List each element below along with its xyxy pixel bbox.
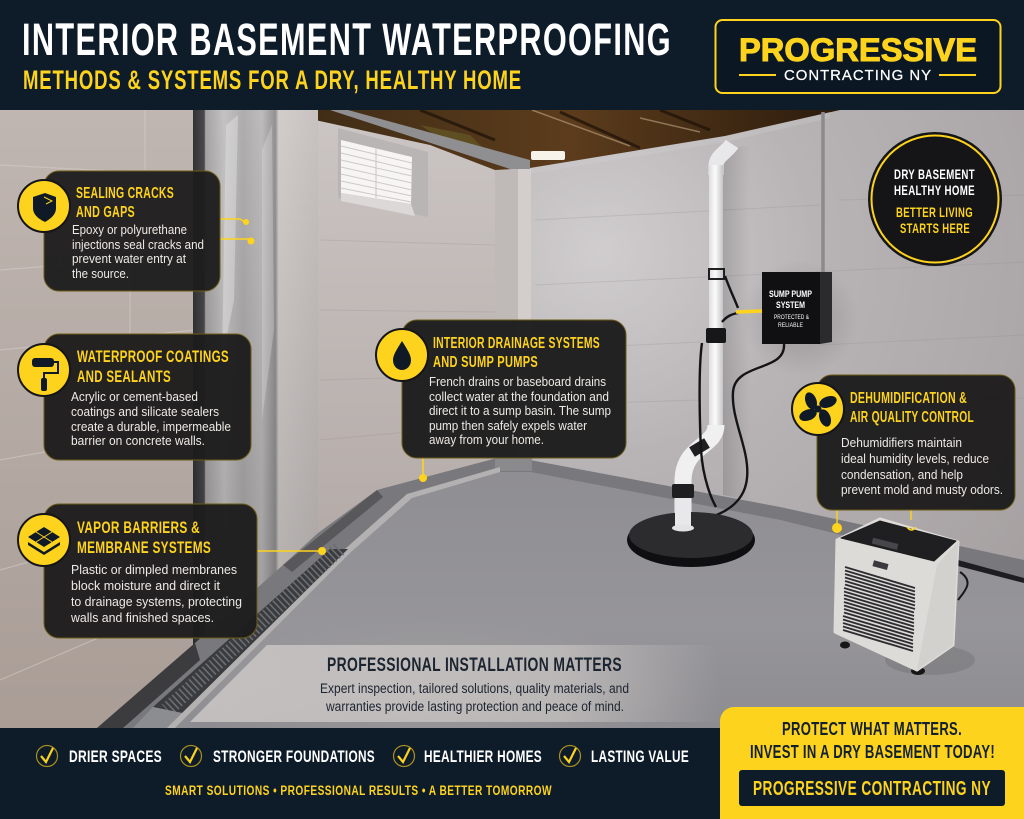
floor bbox=[175, 472, 1024, 728]
panel: interior drainage: pump then safely expels water bbox=[429, 419, 587, 433]
power cables bbox=[700, 276, 784, 518]
panel: dehumidification: Dehumidifiers maintain bbox=[841, 435, 962, 450]
panel: waterproof coatings: coatings and silicate sealers bbox=[71, 405, 219, 419]
panel: vapor barriers: walls and finished spaces. bbox=[70, 610, 214, 625]
panel: waterproof coatings: Acrylic or cement-based bbox=[71, 390, 198, 404]
panel: sealing cracks: SEALING CRACKS bbox=[76, 185, 174, 202]
panel: waterproof coatings: barrier on concrete walls. bbox=[71, 434, 205, 448]
panel: dehumidification: condensation, and help bbox=[841, 467, 963, 482]
professional installation band: warranties provide lasting protection and peace of mind. bbox=[325, 699, 624, 714]
window bbox=[338, 128, 428, 217]
ceiling light bbox=[531, 151, 565, 160]
panel: vapor barriers: VAPOR BARRIERS & bbox=[77, 519, 200, 537]
panel: vapor barriers: block moisture and direct it bbox=[71, 578, 220, 593]
benefit: lasting value: LASTING VALUE bbox=[591, 748, 689, 766]
panel: interior drainage: away from your home. bbox=[429, 433, 544, 447]
call to action panel bbox=[720, 707, 1024, 819]
dehumidifier bbox=[835, 519, 1024, 675]
benefit: stronger foundations bbox=[180, 746, 375, 766]
logo bbox=[716, 20, 1000, 93]
badge: dry basement: DRY BASEMENT bbox=[894, 166, 975, 182]
professional installation band bbox=[190, 645, 720, 722]
panel: interior drainage: direct it to a sump basin. The sump bbox=[429, 404, 611, 418]
badge: dry basement: BETTER LIVING bbox=[896, 204, 973, 220]
badge: dry basement bbox=[868, 132, 1002, 266]
panel: dehumidification: ideal humidity levels, reduce bbox=[841, 451, 989, 466]
panel: vapor barriers bbox=[18, 504, 326, 638]
sump pump control box: RELIABLE bbox=[778, 322, 804, 329]
callout connector to control box bbox=[736, 311, 762, 312]
panel: sealing cracks: the source. bbox=[72, 267, 129, 281]
tagline: SMART SOLUTIONS • PROFESSIONAL RESULTS • A BETTER TOMORROW bbox=[165, 783, 552, 798]
panel: sealing cracks: Epoxy or polyurethane bbox=[72, 223, 187, 237]
sump pump control box bbox=[762, 272, 832, 344]
panel: waterproof coatings bbox=[18, 334, 251, 460]
panel: sealing cracks: AND GAPS bbox=[76, 204, 135, 221]
electrical conduit bbox=[821, 112, 825, 272]
panel: vapor barriers: Plastic or dimpled membranes bbox=[71, 562, 237, 577]
professional installation band: PROFESSIONAL INSTALLATION MATTERS bbox=[327, 655, 622, 676]
panel: interior drainage: French drains or baseboard drains bbox=[429, 375, 606, 389]
panel: interior drainage: INTERIOR DRAINAGE SYSTEMS bbox=[433, 335, 600, 352]
badge: dry basement: STARTS HERE bbox=[900, 220, 970, 236]
benefit: drier spaces bbox=[36, 746, 162, 766]
panel: waterproof coatings: create a durable, impermeable bbox=[71, 420, 231, 434]
panel: sealing cracks: prevent water entry at bbox=[72, 252, 186, 266]
panel: dehumidification: DEHUMIDIFICATION & bbox=[850, 390, 967, 407]
panel: sealing cracks bbox=[18, 171, 254, 291]
subtitle: METHODS & SYSTEMS FOR A DRY, HEALTHY HOME bbox=[23, 65, 522, 95]
badge: dry basement: HEALTHY HOME bbox=[894, 182, 975, 198]
benefit: healthier homes bbox=[394, 746, 542, 766]
benefit: healthier homes: HEALTHIER HOMES bbox=[424, 748, 542, 766]
ceiling joists bbox=[300, 110, 840, 170]
sump basin lid bbox=[627, 498, 755, 567]
benefit: stronger foundations: STRONGER FOUNDATIONS bbox=[213, 748, 375, 766]
title: INTERIOR BASEMENT WATERPROOFING bbox=[22, 14, 672, 65]
sump pump control box: PROTECTED & bbox=[774, 314, 809, 321]
panel: interior drainage: collect water at the foundation and bbox=[429, 390, 609, 404]
logo: PROGRESSIVE bbox=[739, 32, 977, 68]
panel: waterproof coatings: AND SEALANTS bbox=[77, 368, 171, 386]
panel: interior drainage: AND SUMP PUMPS bbox=[433, 354, 538, 371]
panel: interior drainage bbox=[376, 320, 626, 482]
panel: vapor barriers: to drainage systems, protecting bbox=[71, 594, 242, 609]
shadow behind pipe and control box bbox=[723, 145, 750, 500]
benefit: drier spaces: DRIER SPACES bbox=[69, 748, 162, 766]
panel: waterproof coatings: WATERPROOF COATINGS bbox=[77, 348, 229, 366]
header bar bbox=[0, 0, 1024, 110]
sump pump control box: SYSTEM bbox=[776, 300, 805, 311]
baseboard and perimeter drain bbox=[97, 458, 1024, 728]
logo: CONTRACTING NY bbox=[784, 67, 932, 84]
sump pump control box: SUMP PUMP bbox=[769, 289, 812, 300]
professional installation band: Expert inspection, tailored solutions, quality materials, and bbox=[320, 681, 629, 696]
sump pump discharge pipe bbox=[672, 144, 732, 527]
panel: dehumidification: prevent mold and musty odors. bbox=[841, 482, 1003, 497]
footer bar bbox=[0, 728, 1024, 819]
plastic vapor barrier sheet bbox=[193, 110, 318, 655]
panel: vapor barriers: MEMBRANE SYSTEMS bbox=[77, 539, 211, 557]
call to action panel: PROTECT WHAT MATTERS. bbox=[782, 719, 962, 739]
basement room photo backdrop bbox=[0, 110, 1024, 760]
benefit: lasting value bbox=[560, 746, 689, 766]
panel: sealing cracks: injections seal cracks and bbox=[72, 238, 204, 252]
panel: dehumidification bbox=[792, 375, 1015, 533]
